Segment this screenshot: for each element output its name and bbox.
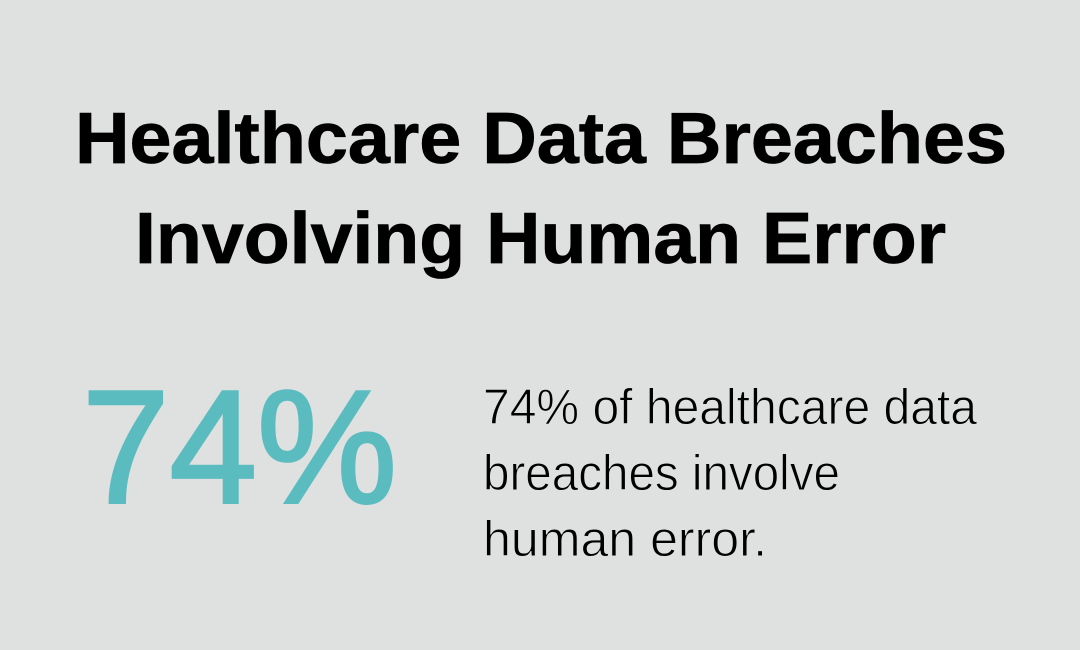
big statistic: 74%: 74% bbox=[82, 358, 397, 538]
title: Involving Human Error bbox=[135, 199, 946, 279]
title bbox=[75, 99, 1007, 279]
title: Healthcare Data Breaches bbox=[75, 99, 1007, 179]
description text bbox=[483, 379, 977, 567]
description text: human error. bbox=[483, 511, 767, 567]
description text: 74% of healthcare data bbox=[483, 379, 977, 435]
description text: breaches involve bbox=[483, 445, 840, 501]
